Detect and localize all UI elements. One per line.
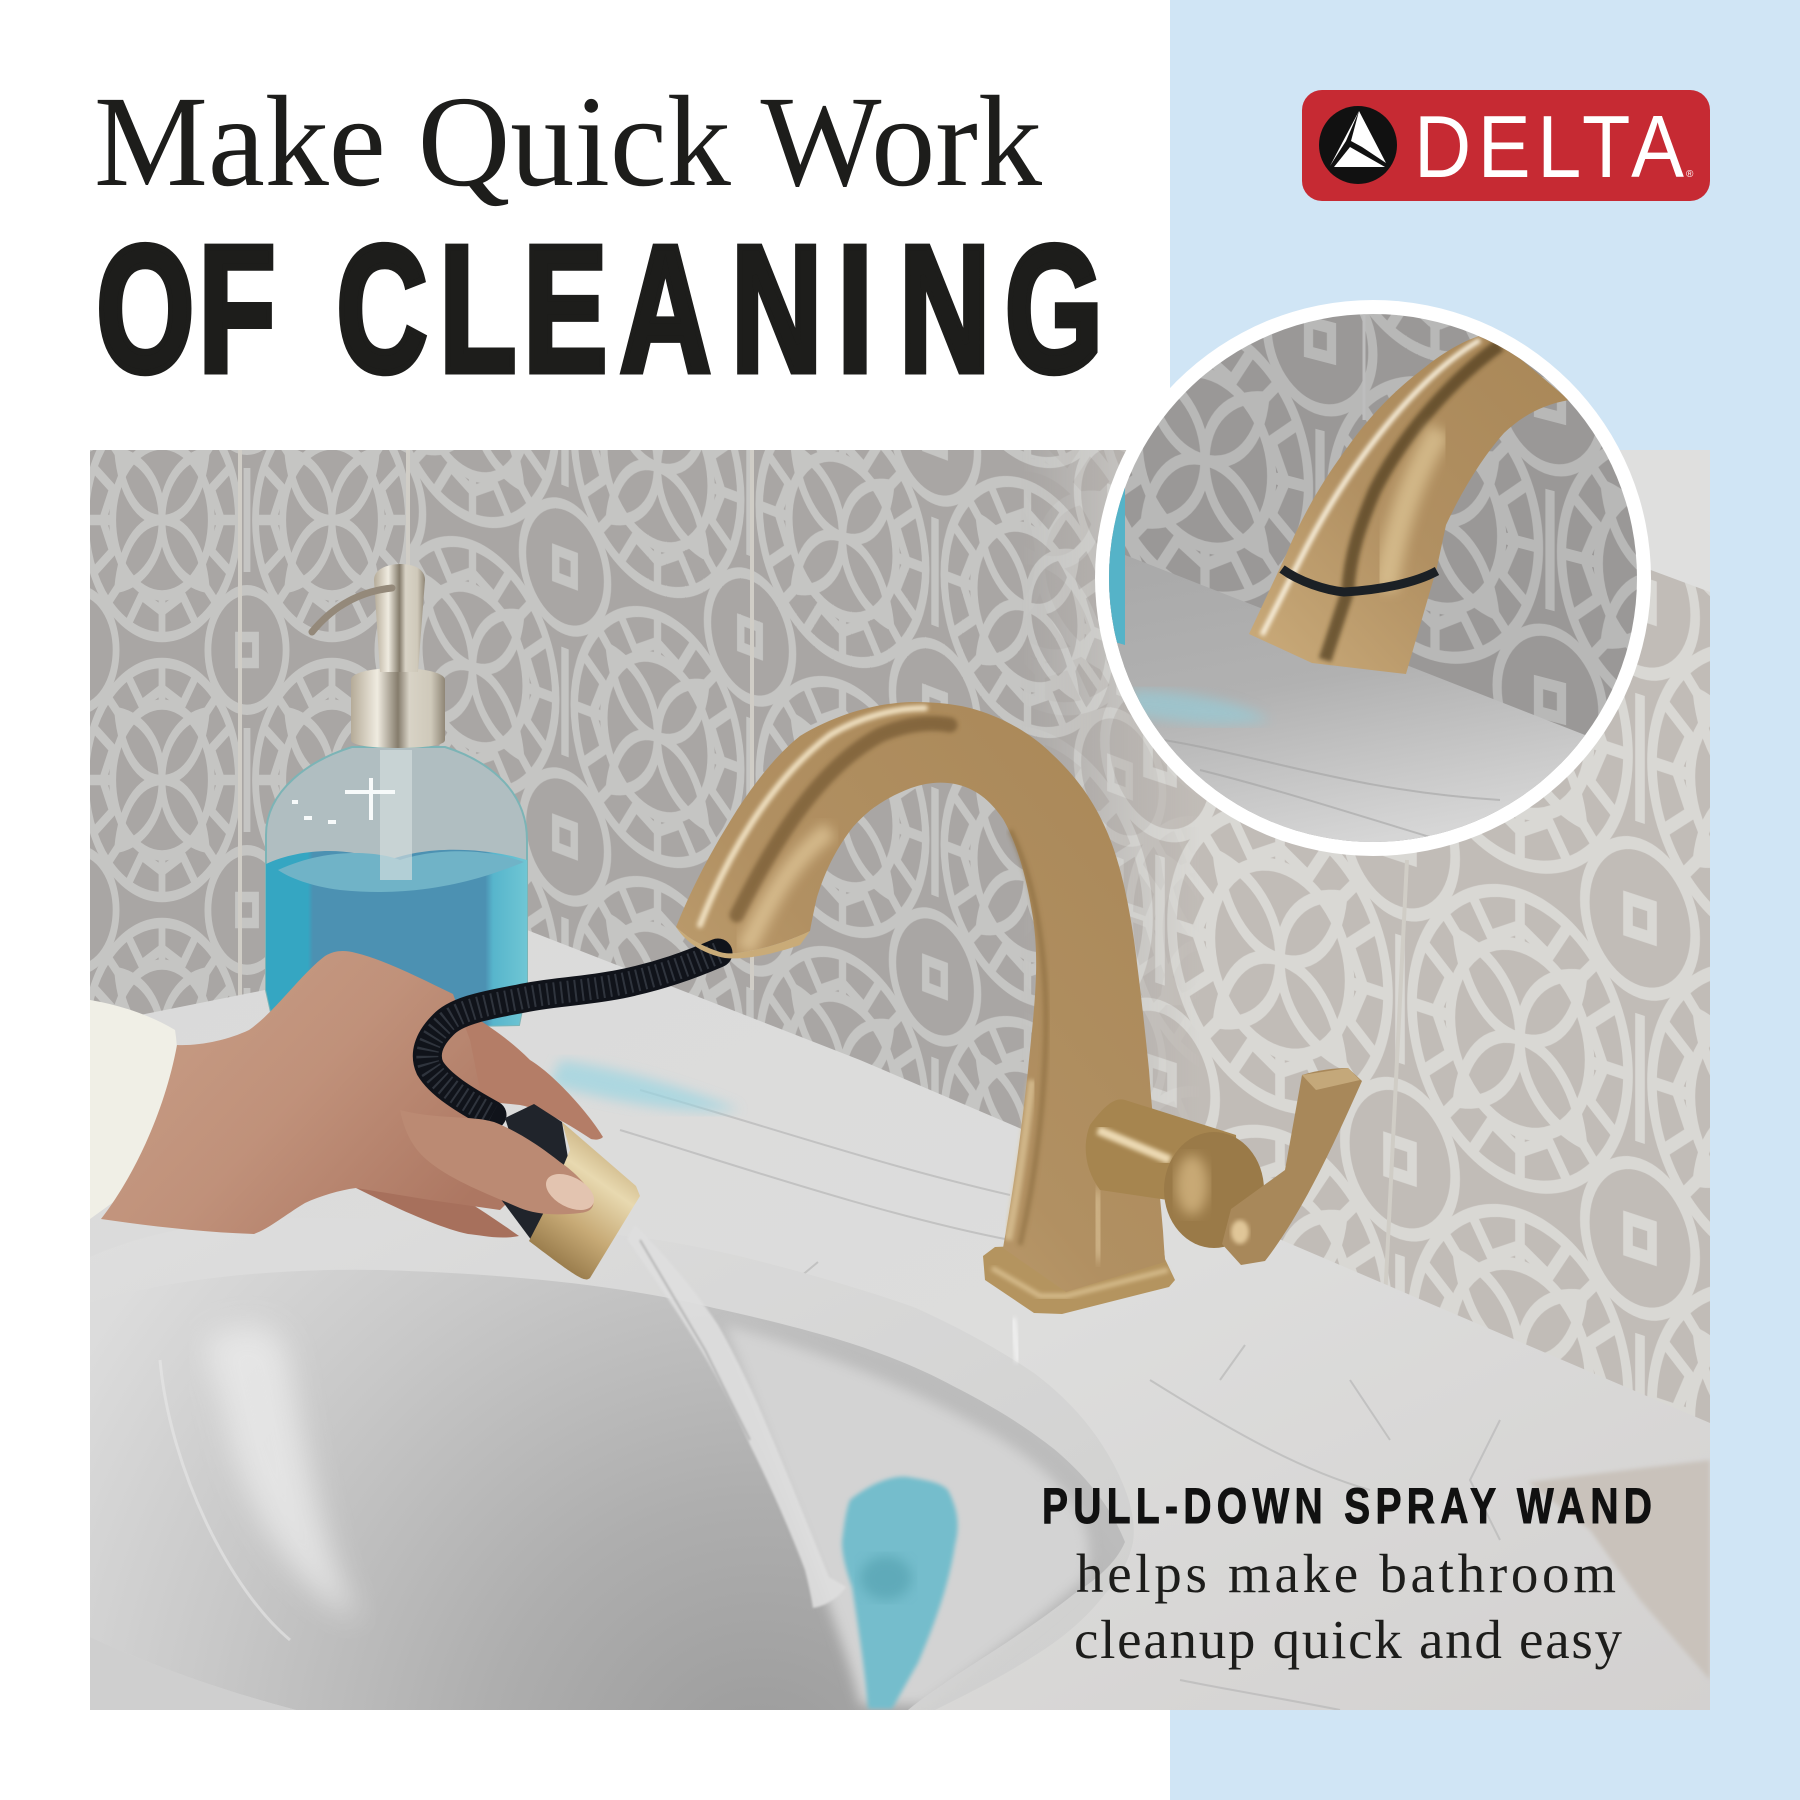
faucet xyxy=(676,702,1362,1314)
wand gold cylinder xyxy=(529,1122,640,1279)
valve cylinder xyxy=(1086,1099,1240,1215)
tile wall far left xyxy=(90,450,406,1014)
wand black head back xyxy=(505,1104,570,1170)
inset marble veins xyxy=(1130,735,1500,840)
thumb nail xyxy=(540,1167,600,1217)
spout bright highlight xyxy=(700,708,925,925)
callout: pull-down spray wand xyxy=(1042,1477,1652,1670)
inset blue reflection xyxy=(1130,690,1270,724)
title: Make Quick Work of Cleaning xyxy=(94,70,1103,409)
inset spout dark band xyxy=(1325,345,1500,660)
title line 1: Make Quick Work xyxy=(94,70,1042,214)
blue soap streak xyxy=(842,1477,958,1709)
handle highlight xyxy=(1302,1068,1360,1090)
light blue side panel xyxy=(1170,0,1800,1800)
logo wordmark: DELTA xyxy=(1414,97,1684,196)
tile wall centre xyxy=(410,450,1182,1129)
spray wand xyxy=(500,1104,640,1279)
white wall top right xyxy=(1620,450,1710,592)
blue liquid xyxy=(266,850,527,1030)
countertop xyxy=(90,930,1710,1710)
water stream xyxy=(627,1225,846,1608)
faucet base plate xyxy=(983,1240,1175,1314)
tile wall right xyxy=(1000,450,1710,1450)
logo red badge xyxy=(1302,90,1710,201)
callout heading: PULL-DOWN SPRAY WAND xyxy=(1042,1477,1652,1534)
tile joints xyxy=(240,450,1407,1340)
soap bottle xyxy=(266,564,527,1030)
logo: Delta xyxy=(1302,90,1710,201)
translucent object bottom right xyxy=(1528,1460,1710,1680)
marble corner xyxy=(90,1637,296,1710)
sink bowl xyxy=(90,1270,1125,1710)
faucet lever handle xyxy=(1222,1068,1362,1265)
callout line 1: helps make bathroom xyxy=(1076,1543,1616,1604)
icon: Delta emblem xyxy=(1319,106,1397,184)
marble veins xyxy=(620,1090,1500,1710)
bowl highlight xyxy=(205,1325,360,1620)
wand black head front xyxy=(500,1198,548,1241)
lower fingers xyxy=(356,1160,519,1238)
inset counter xyxy=(1100,545,1640,860)
callout line 2: cleanup quick and easy xyxy=(1074,1609,1622,1670)
valve shine xyxy=(1098,1130,1170,1160)
inset tile joint xyxy=(1362,310,1366,420)
sink xyxy=(90,1270,1125,1710)
inset spout highlight xyxy=(1262,340,1480,635)
registered mark: ® xyxy=(1686,169,1694,180)
sink rim xyxy=(90,1218,1134,1710)
panel: bathroom photo xyxy=(90,447,1710,1710)
inset blue bottle edge xyxy=(1108,480,1125,645)
spout dark band xyxy=(737,723,950,915)
handle joint shine xyxy=(1231,1220,1249,1244)
inset scene xyxy=(1100,300,1660,860)
body center crease xyxy=(1010,830,1046,1245)
liquid surface xyxy=(278,851,524,892)
inset white ring xyxy=(1095,300,1651,856)
pump nozzle xyxy=(312,588,392,632)
inset circle: spout close-up xyxy=(1095,300,1660,860)
counter reflection of faucet xyxy=(1013,1318,1018,1362)
inset black ring xyxy=(1282,569,1437,592)
faucet base highlight xyxy=(992,1268,1168,1296)
bottle glass xyxy=(266,747,527,1030)
palm and wrist xyxy=(101,951,540,1234)
sleeve xyxy=(90,1000,177,1219)
spout tip shine xyxy=(745,830,830,950)
pump stem xyxy=(374,564,425,672)
inset tile wall xyxy=(1100,300,1660,860)
dip tube xyxy=(380,750,412,880)
black braided hose xyxy=(427,953,718,1115)
faucet arching spout body xyxy=(676,702,1165,1292)
bowl edge shine xyxy=(160,1360,290,1640)
lower body shine xyxy=(1096,1190,1100,1260)
streak shade xyxy=(860,1556,912,1600)
counter reflection of blue soap xyxy=(550,1060,740,1111)
upper fingers xyxy=(440,995,603,1140)
knob shine xyxy=(1176,1155,1208,1215)
spout tip over hose xyxy=(676,927,810,958)
inset spout shine xyxy=(1385,430,1440,590)
bowl light right of stream xyxy=(725,1325,1089,1705)
inset spout xyxy=(1249,335,1569,674)
pump collar xyxy=(351,668,445,748)
title line 2: OF CLEANING xyxy=(96,208,1103,409)
glass glints xyxy=(292,778,395,822)
thumb xyxy=(400,1110,600,1217)
valve knob xyxy=(1164,1132,1264,1248)
body shine xyxy=(1008,1080,1032,1240)
